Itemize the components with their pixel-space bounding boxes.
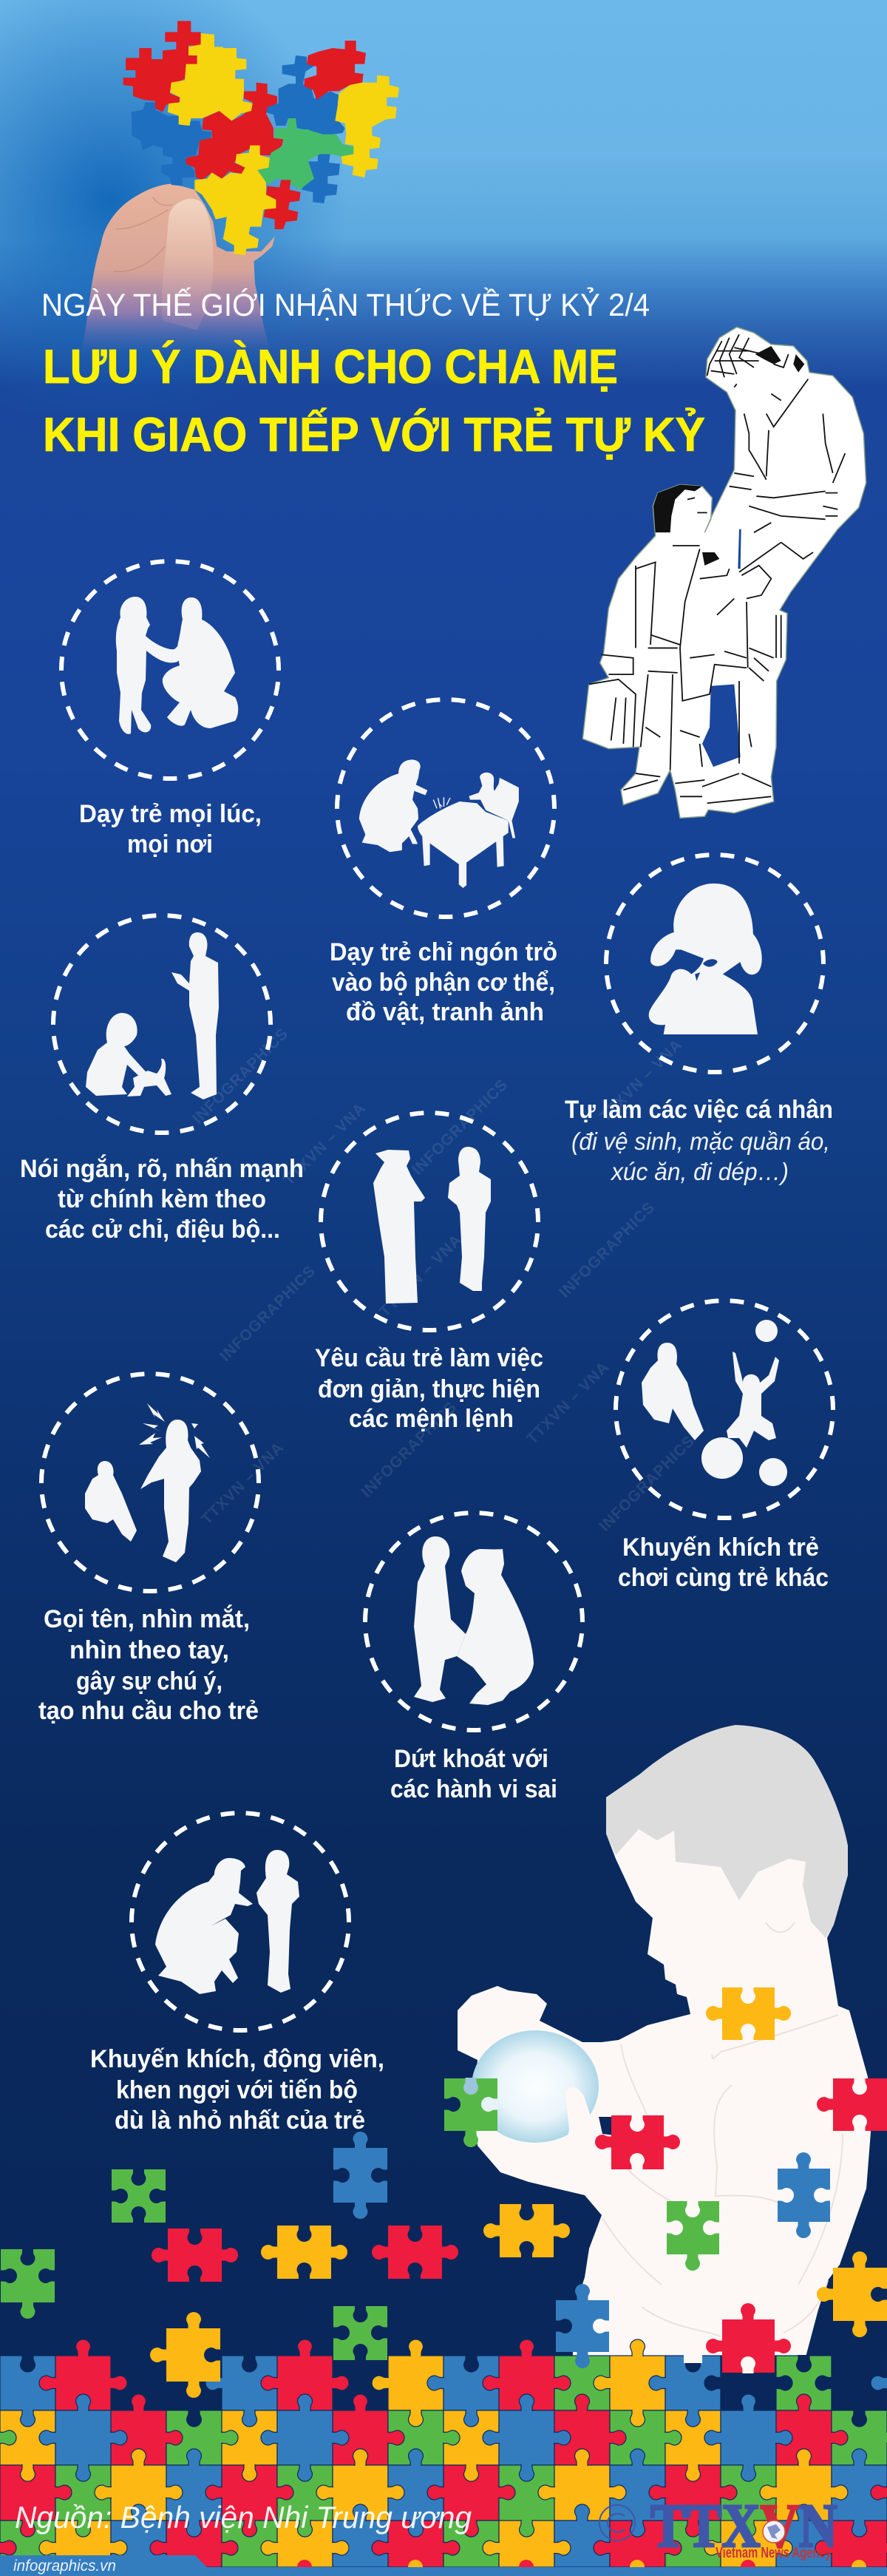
caption 6: chơi cùng trẻ khác xyxy=(618,1564,829,1592)
title: LƯU Ý DÀNH CHO CHA MẸ xyxy=(43,339,618,393)
caption 5 xyxy=(315,1344,543,1433)
caption 2: vào bộ phận cơ thể, xyxy=(332,969,555,997)
piece: yellow xyxy=(261,2225,347,2280)
caption 1 xyxy=(79,800,262,858)
caption 4 xyxy=(20,1155,304,1244)
piece: blue xyxy=(777,2152,831,2238)
caption 7: tạo nhu cầu cho trẻ xyxy=(38,1697,259,1725)
wordmark: TTXVN xyxy=(650,2492,837,2560)
dashed ring 9 xyxy=(132,1813,349,2030)
floating puzzle pieces xyxy=(0,1987,887,2398)
caption 7: nhìn theo tay, xyxy=(69,1636,229,1664)
blue lower right xyxy=(302,153,340,203)
card 1: teach anytime xyxy=(61,561,279,858)
piece: yellow xyxy=(706,1987,791,2041)
caption 9: dù là nhỏ nhất của trẻ xyxy=(115,2106,365,2135)
piece: blue xyxy=(333,2132,388,2219)
silhouettes: woman pointing at seated child xyxy=(85,1403,210,1562)
caption 4: các cử chỉ, điệu bộ... xyxy=(45,1216,280,1244)
caption 9 xyxy=(90,2045,384,2135)
caption 3: xúc ăn, đi dép…) xyxy=(610,1158,789,1185)
watermarks: INFOGRAPHICS xyxy=(358,1398,461,1501)
subtitle: NGÀY THẾ GIỚI NHẬN THỨC VỀ TỰ KỶ 2/4 xyxy=(41,287,650,323)
watermarks: TTXVN – VNA xyxy=(376,1231,466,1321)
blue upper right xyxy=(265,55,347,143)
card 8: firm with wrong behaviour xyxy=(365,1513,582,1803)
illustration: mother and child xyxy=(582,328,866,818)
caption 6: Khuyến khích trẻ xyxy=(622,1533,819,1562)
caption 5: Yêu cầu trẻ làm việc xyxy=(315,1344,543,1372)
hand xyxy=(81,183,275,355)
card 5: simple tasks xyxy=(315,1113,543,1433)
caption 9: khen ngợi với tiến bộ xyxy=(116,2076,358,2104)
title xyxy=(43,339,705,461)
piece: red xyxy=(152,2228,238,2282)
caption 3 xyxy=(565,1096,833,1185)
dashed ring 6 xyxy=(616,1301,833,1518)
yellow right xyxy=(335,75,399,177)
piece: red xyxy=(595,2115,680,2170)
dashed ring 5 xyxy=(321,1113,538,1330)
blue left xyxy=(131,102,212,186)
piece: red xyxy=(817,2078,887,2132)
watermarks: INFOGRAPHICS xyxy=(409,1076,512,1179)
background shadow behind hand xyxy=(0,0,414,414)
watermarks: INFOGRAPHICS xyxy=(596,1432,699,1535)
caption 8: Dứt khoát với xyxy=(394,1745,548,1773)
piece: blue xyxy=(555,2284,610,2368)
watermarks: INFOGRAPHICS xyxy=(217,1262,319,1365)
top row tabs xyxy=(0,2339,887,2555)
caption 6 xyxy=(618,1533,829,1592)
silhouettes: child and crouching woman xyxy=(414,1536,534,1705)
caption 7: Gọi tên, nhìn mắt, xyxy=(44,1605,250,1633)
caption 5: đơn giản, thực hiện xyxy=(318,1375,540,1403)
caption 7: gây sự chú ý, xyxy=(76,1667,222,1695)
piece: green xyxy=(0,2248,55,2319)
caption 8: các hành vi sai xyxy=(390,1775,557,1803)
lower rows xyxy=(0,2410,222,2567)
dashed ring 7 xyxy=(41,1374,259,1591)
watermarks: TTXVN – VNA xyxy=(280,1099,370,1189)
caption 3: (đi vệ sinh, mặc quần áo, xyxy=(571,1128,830,1155)
card 6: play with others xyxy=(616,1301,833,1592)
red upper right xyxy=(305,41,366,100)
dashed ring 8 xyxy=(365,1513,582,1730)
silhouettes: children and balls xyxy=(642,1320,787,1486)
card 9: encourage and praise xyxy=(90,1813,384,2135)
piece: green xyxy=(333,2305,388,2361)
caption 7 xyxy=(38,1605,259,1725)
caption 1: mọi nơi xyxy=(127,830,213,858)
caption 5: các mệnh lệnh xyxy=(349,1405,514,1433)
caption 2 xyxy=(330,938,557,1026)
yellow lower xyxy=(194,146,276,255)
silhouettes: girl and kneeling man xyxy=(116,597,238,734)
caption 4: từ chính kèm theo xyxy=(58,1185,266,1213)
silhouettes: crouching man and child xyxy=(155,1850,299,1994)
piece: green xyxy=(111,2169,166,2223)
caption 3: Tự làm các việc cá nhân xyxy=(565,1096,833,1124)
watermarks xyxy=(189,1025,699,1535)
red upper left xyxy=(123,21,201,112)
bottom blue bar xyxy=(0,2555,887,2576)
boy line details xyxy=(602,1922,843,2336)
watermarks: TTXVN – VNA xyxy=(198,1439,288,1528)
watermarks: TTXVN – VNA xyxy=(523,1358,613,1448)
boy body xyxy=(458,1725,871,2365)
piece: yellow xyxy=(817,2251,887,2337)
boy hair xyxy=(606,1725,848,1938)
interlocking tabs xyxy=(21,2394,238,2555)
puzzle heart xyxy=(123,21,399,255)
gap between arm and hand xyxy=(599,2117,642,2137)
piece: red xyxy=(706,2303,791,2373)
white body in notch xyxy=(684,2351,702,2363)
icon: hand holding puzzle heart xyxy=(81,21,399,355)
red lower xyxy=(264,180,301,229)
card 3: self care xyxy=(565,855,833,1185)
dashed ring 2 xyxy=(337,699,554,917)
watermarks: INFOGRAPHICS xyxy=(556,1199,659,1301)
watermarks: INFOGRAPHICS xyxy=(189,1025,292,1128)
red centre xyxy=(186,83,283,180)
watermarks: TTXVN – VNA xyxy=(597,1036,686,1125)
piece: yellow xyxy=(483,2203,570,2258)
silhouettes: man, table and child xyxy=(359,759,519,888)
caption 2: Dạy trẻ chỉ ngón trỏ xyxy=(330,938,557,966)
dashed ring 3 xyxy=(606,855,823,1072)
title: KHI GIAO TIẾP VỚI TRẺ TỰ KỶ xyxy=(43,407,705,461)
ball xyxy=(472,2030,599,2143)
card 4: short clear speech xyxy=(20,915,304,1244)
logo: TTXVN xyxy=(599,2492,837,2561)
caption 9: Khuyến khích, động viên, xyxy=(90,2045,384,2073)
thumb over ball xyxy=(562,2087,599,2166)
yellow upper left xyxy=(168,33,253,126)
illustration: boy holding ball xyxy=(458,1725,871,2365)
top row pieces xyxy=(0,2356,887,2410)
silhouettes: two standing figures xyxy=(373,1147,491,1304)
source: Nguồn: Bệnh viện Nhi Trung ương xyxy=(15,2500,472,2535)
dashed ring 1 xyxy=(61,561,279,779)
bottom tab bumps xyxy=(214,2560,887,2576)
card 2: point with index finger xyxy=(330,699,557,1026)
silhouette: child with floppy hat xyxy=(649,884,762,1034)
card 7: call name and eye contact xyxy=(38,1374,259,1725)
caption 4: Nói ngắn, rõ, nhấn mạnh xyxy=(20,1155,304,1183)
piece: green xyxy=(666,2200,720,2271)
copyright mark xyxy=(599,2505,635,2541)
agency name: Vietnam News Agency xyxy=(716,2545,832,2561)
puzzle grid xyxy=(0,2339,887,2567)
website: infographics.vn xyxy=(13,2558,116,2575)
piece: green xyxy=(444,2078,498,2147)
green xyxy=(257,118,353,190)
piece: yellow xyxy=(150,2312,221,2398)
dashed ring 4 xyxy=(53,915,271,1133)
caption 2: đồ vật, tranh ảnh xyxy=(346,998,544,1026)
caption 8 xyxy=(390,1745,557,1803)
silhouettes: man, child and cat xyxy=(86,932,219,1099)
globe xyxy=(763,2521,785,2543)
piece: red xyxy=(372,2225,458,2280)
caption 1: Dạy trẻ mọi lúc, xyxy=(79,800,262,828)
